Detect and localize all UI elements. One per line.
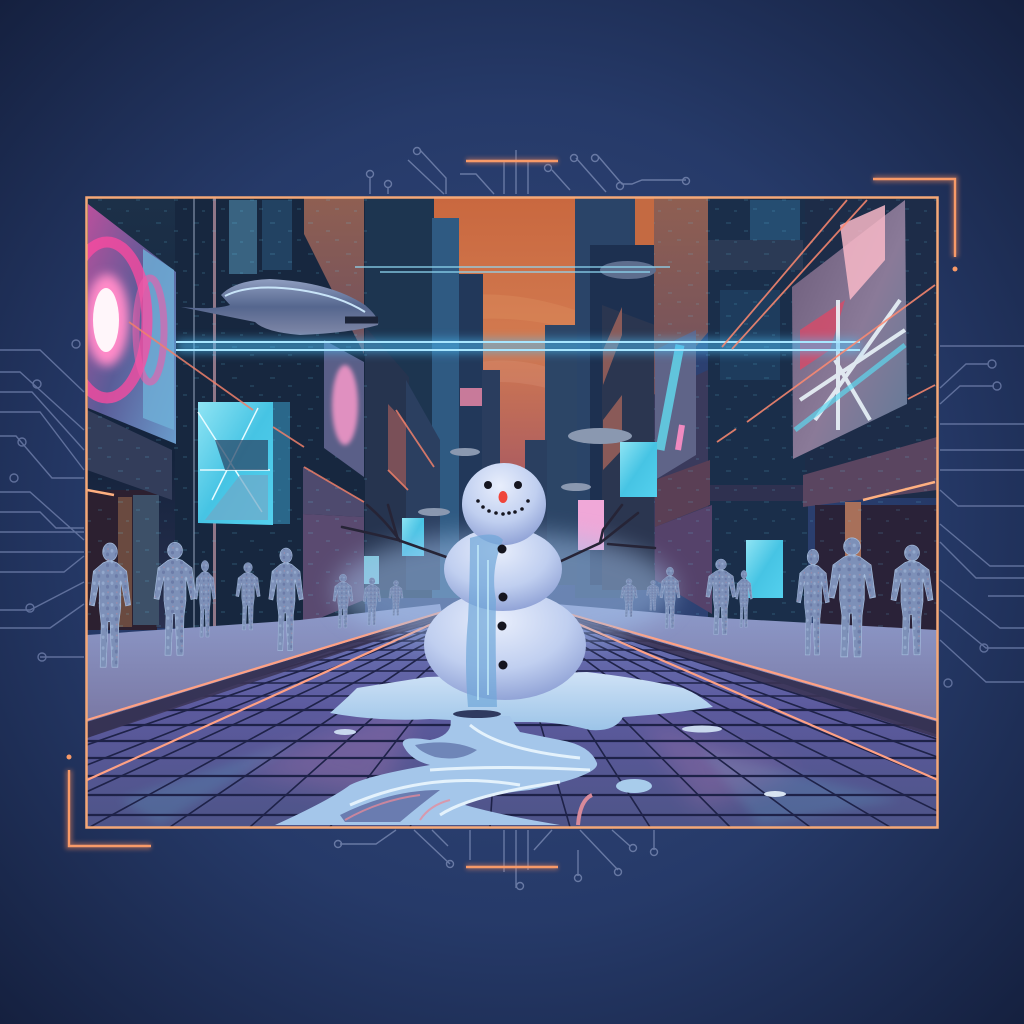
far buildings left bbox=[362, 198, 500, 598]
meltwater puddle bbox=[275, 672, 786, 825]
street haze bbox=[335, 532, 675, 648]
billboard: cyan shards bbox=[198, 402, 290, 525]
billboard: right small bbox=[655, 330, 696, 480]
neon light beams bbox=[87, 200, 935, 502]
hover craft bbox=[181, 261, 656, 516]
hover craft: small right bbox=[600, 261, 656, 279]
billboards bbox=[67, 200, 907, 598]
snowman melt streaks bbox=[466, 534, 503, 707]
snowman arms bbox=[342, 505, 655, 562]
corner bracket: bottom left bbox=[66, 754, 151, 846]
billboard: centre right cyan bbox=[620, 442, 657, 497]
billboard: bottom right cyan bbox=[746, 540, 783, 598]
ice figures bbox=[89, 538, 933, 667]
snowman buttons bbox=[498, 544, 508, 670]
billboard: pink small bbox=[578, 500, 604, 550]
billboard: far left cyan bbox=[402, 518, 424, 556]
billboard: mid-left pink bbox=[324, 340, 364, 477]
circuit traces: bottom bbox=[334, 830, 658, 890]
sidewalk right bbox=[555, 604, 938, 722]
circuit traces: left bbox=[0, 340, 84, 661]
far buildings right bbox=[525, 198, 660, 598]
sky bbox=[434, 198, 575, 468]
road bbox=[88, 611, 936, 826]
near building right bbox=[654, 198, 938, 630]
top bracket accents bbox=[466, 161, 558, 867]
circuit traces: right bbox=[940, 346, 1024, 687]
near building left bbox=[87, 198, 367, 630]
snowman body bbox=[424, 590, 586, 700]
snowman nose bbox=[498, 491, 508, 503]
snowman bbox=[342, 463, 655, 707]
scene panel bbox=[88, 198, 936, 826]
circuit traces: top bbox=[366, 148, 690, 194]
billboard: left pink bbox=[88, 204, 176, 444]
billboard: large right bbox=[792, 200, 907, 459]
scene frame bbox=[86, 198, 938, 828]
snowman eyes bbox=[484, 481, 522, 489]
hover craft: large bbox=[181, 279, 378, 335]
snowman smile bbox=[476, 499, 530, 516]
sidewalk left bbox=[87, 604, 442, 722]
corner bracket: top right bbox=[873, 179, 958, 272]
